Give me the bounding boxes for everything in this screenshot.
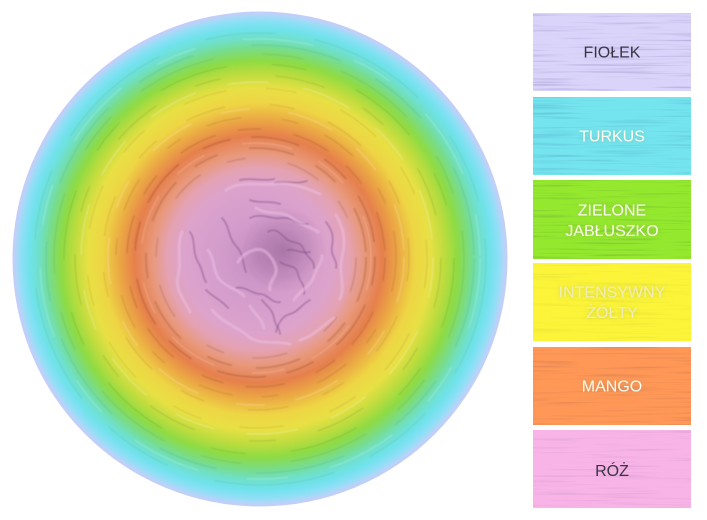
swatch: Turkus	[533, 97, 691, 175]
swatch: Zielone jabłuszko: ZIELONE	[578, 202, 646, 220]
swatch: Intensywny żółty: INTENSYWNY	[559, 284, 666, 302]
swatch panel	[533, 13, 691, 508]
yarn cake	[12, 12, 508, 506]
swatch: Intensywny żółty	[533, 263, 691, 341]
swatch: Fiołek: FIOŁEK	[584, 44, 641, 62]
yarn centre tangle	[177, 179, 344, 344]
swatch: Zielone jabłuszko	[533, 180, 691, 259]
swatch: Turkus: TURKUS	[579, 128, 645, 146]
swatch: Fiołek	[533, 13, 691, 91]
swatch: Mango	[533, 347, 691, 425]
swatch: Intensywny żółty: ŻÓŁTY	[586, 303, 638, 322]
swatch: Zielone jabłuszko: JABŁUSZKO	[565, 223, 659, 240]
swatch: Róż: RÓŻ	[595, 461, 629, 480]
swatch: Róż	[533, 430, 691, 508]
swatch: Mango: MANGO	[582, 378, 642, 396]
